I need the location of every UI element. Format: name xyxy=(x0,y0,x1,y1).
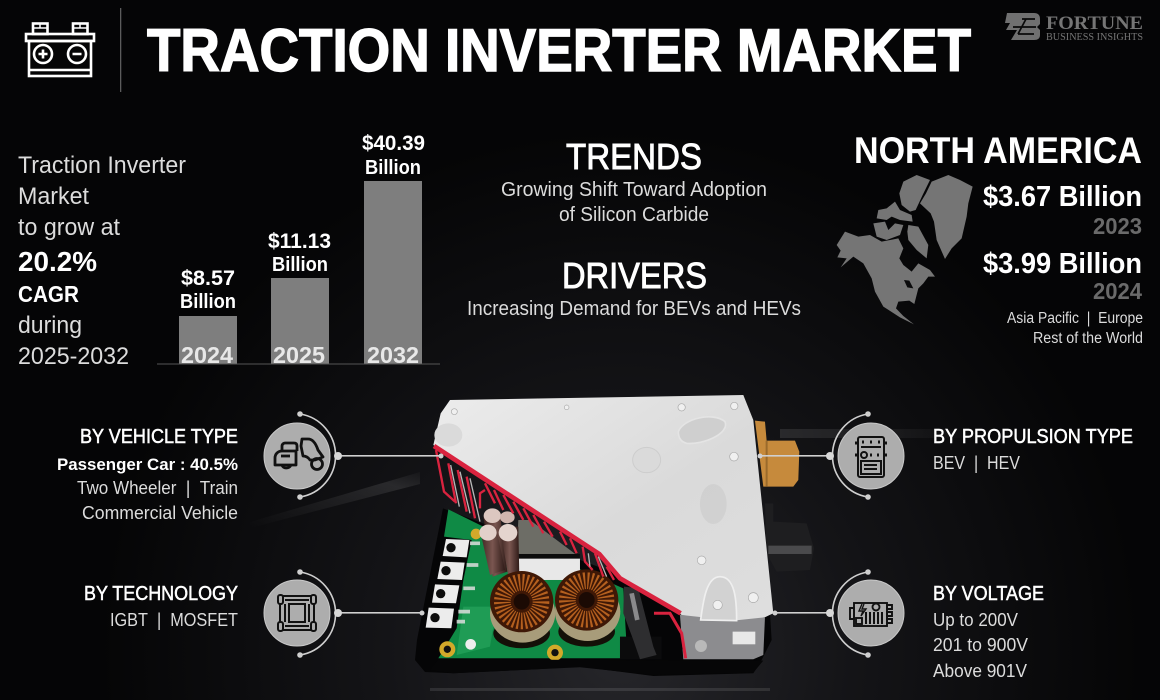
black capacitor xyxy=(623,587,657,659)
text block: by technology xyxy=(84,583,238,630)
text block: by vehicle type: Commercial Vehicle xyxy=(82,503,238,523)
text block: trends: TRENDS xyxy=(566,136,702,177)
text block: by voltage: Up to 200V xyxy=(933,610,1018,630)
bar chart: market size: 2025 xyxy=(273,342,325,368)
text block: by voltage: BY VOLTAGE xyxy=(933,583,1044,605)
text block: North America: $3.67 Billion xyxy=(983,181,1142,213)
icon: propulsion pedal xyxy=(826,411,904,500)
icon: battery xyxy=(26,24,94,76)
text block: North America: Rest of the World xyxy=(1033,330,1143,347)
bar chart: market size: Billion xyxy=(365,157,421,179)
text block: by vehicle type: Two Wheeler | Train xyxy=(77,478,238,498)
text block: by voltage: Above 901V xyxy=(933,661,1027,681)
text block: CAGR summary: CAGR xyxy=(18,281,79,307)
capacitors xyxy=(479,508,519,577)
photo: traction inverter xyxy=(415,395,814,676)
text block: by propulsion type xyxy=(933,426,1133,473)
text block: North America: Asia Pacific | Europe xyxy=(1007,310,1143,327)
icon: voltage circuit board xyxy=(826,569,904,658)
connector lines xyxy=(338,454,830,616)
text block: CAGR summary xyxy=(18,152,186,370)
text block: by voltage: 201 to 900V xyxy=(933,635,1028,655)
bar chart: market size xyxy=(157,132,440,368)
text block: by vehicle type: BY VEHICLE TYPE xyxy=(80,426,238,448)
text block: drivers: Increasing Demand for BEVs and HEVs xyxy=(467,298,801,320)
coil xyxy=(490,571,555,648)
text block: North America: NORTH AMERICA xyxy=(854,130,1142,171)
logo: Fortune Business Insights xyxy=(1005,13,1143,43)
text block: North America: 2024 xyxy=(1093,278,1142,304)
base lip xyxy=(430,659,763,675)
text block: by propulsion type: BEV | HEV xyxy=(933,453,1020,473)
title: TRACTION INVERTER MARKET xyxy=(147,17,971,84)
bar chart: market size: $8.57 xyxy=(181,267,235,290)
text block: drivers: DRIVERS xyxy=(562,255,707,296)
text block: CAGR summary: Traction Inverter xyxy=(18,152,186,179)
text block: North America xyxy=(854,130,1143,347)
PCB xyxy=(438,509,627,658)
text block: North America: 2023 xyxy=(1093,213,1142,239)
map: North America xyxy=(837,175,973,324)
bar chart: market size: Billion xyxy=(180,291,236,313)
bar chart: market size: 2024 xyxy=(181,342,233,368)
bar chart: market size: 2032 xyxy=(367,342,419,368)
transistors xyxy=(426,539,469,628)
plate xyxy=(433,395,773,621)
red traces xyxy=(434,446,686,658)
coil xyxy=(555,569,620,647)
text block: North America: $3.99 Billion xyxy=(983,248,1142,280)
text block: by vehicle type xyxy=(57,426,238,523)
text block: by voltage xyxy=(933,583,1044,681)
text block: by technology: BY TECHNOLOGY xyxy=(84,583,238,605)
bar chart: market size: $11.13 xyxy=(268,230,331,253)
text block: CAGR summary: 2025-2032 xyxy=(18,343,129,370)
text block: CAGR summary: to grow at xyxy=(18,214,120,241)
text block: trends xyxy=(501,136,767,226)
logo: Fortune Business Insights: FORTUNE xyxy=(1046,13,1143,34)
text block: CAGR summary: 20.2% xyxy=(18,246,97,277)
text block: by vehicle type: Passenger Car : 40.5% xyxy=(57,455,238,474)
dark tray xyxy=(415,508,772,676)
text block: trends: of Silicon Carbide xyxy=(559,204,709,226)
bar chart: market size: Billion xyxy=(272,254,328,276)
bar chart: market size: $40.39 xyxy=(362,132,425,155)
orange connector xyxy=(755,421,799,487)
icon: technology module xyxy=(264,569,342,658)
metal housing xyxy=(680,615,765,659)
internal module xyxy=(517,520,577,555)
text block: trends: Growing Shift Toward Adoption xyxy=(501,179,767,201)
icon: vehicle type scooter xyxy=(264,411,342,500)
text block: drivers xyxy=(467,255,801,320)
text block: by propulsion type: BY PROPULSION TYPE xyxy=(933,426,1133,448)
logo: Fortune Business Insights: BUSINESS INSIGHTS xyxy=(1046,32,1143,43)
black connector xyxy=(765,503,814,572)
text block: by technology: IGBT | MOSFET xyxy=(110,610,238,630)
text block: CAGR summary: during xyxy=(18,312,82,339)
text block: CAGR summary: Market xyxy=(18,183,89,210)
